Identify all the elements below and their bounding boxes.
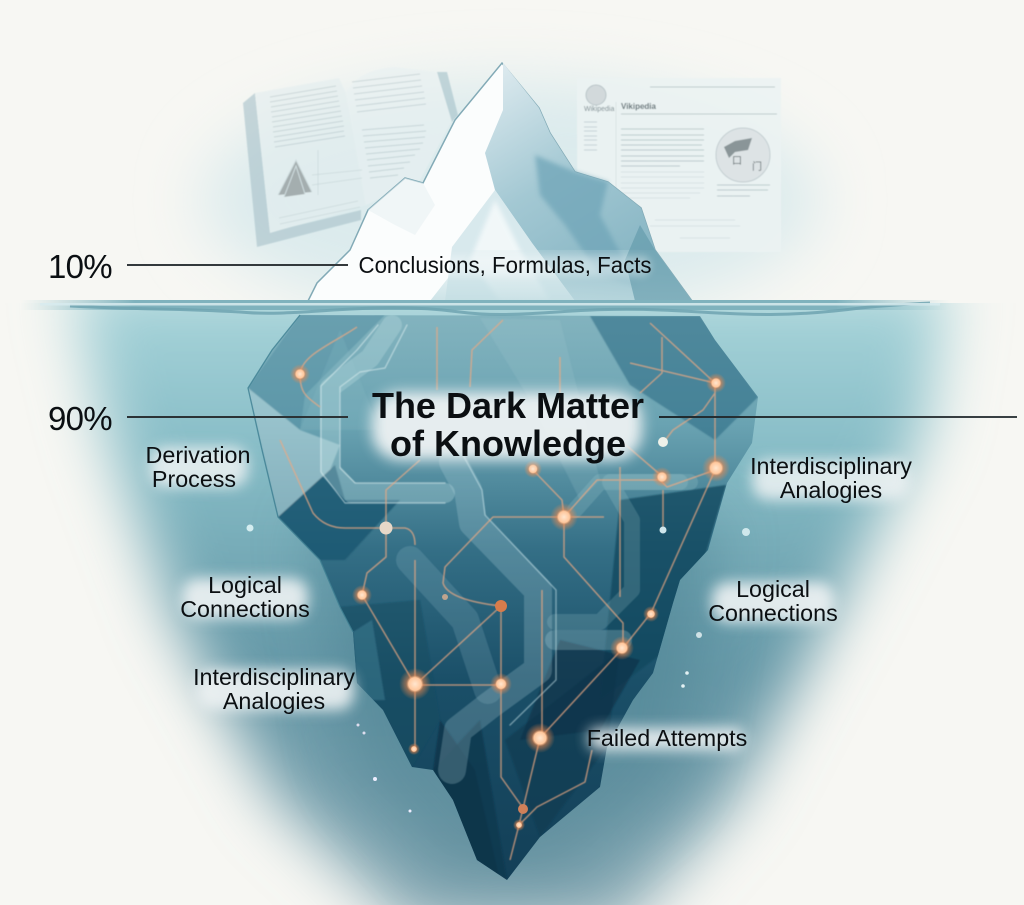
label: logical connections left: Logical — [208, 572, 282, 598]
label: derivation process: Derivation — [146, 442, 250, 468]
90% leader line right — [659, 416, 1017, 418]
label glows — [150, 256, 910, 750]
10% label: 10% — [48, 248, 112, 285]
iceberg tip — [308, 63, 692, 301]
channel: upper right — [555, 482, 680, 622]
90% leader line left — [127, 416, 348, 418]
icon: wikipedia page — [577, 78, 781, 252]
wiki globe: 口 — [732, 156, 742, 167]
channel: left pipe — [321, 325, 445, 503]
underwater glow — [70, 280, 950, 905]
wiki body lines — [584, 87, 777, 238]
90% label: 90% — [48, 400, 112, 437]
label: logical connections left: Connections — [180, 596, 310, 622]
label: logical connections right: Connections — [708, 600, 838, 626]
channel: central pipe — [452, 455, 556, 770]
wiki heading: Vikipedia — [621, 102, 657, 111]
label: derivation process: Process — [152, 466, 236, 492]
title: The Dark Matter — [372, 385, 644, 426]
label: interdisciplinary analogies right: Analogies — [780, 477, 882, 503]
tip label: Conclusions, Formulas, Facts — [358, 252, 652, 278]
knowledge network — [280, 320, 715, 860]
label: failed attempts: Failed Attempts — [587, 725, 747, 751]
wiki small globe — [586, 85, 606, 105]
title: of Knowledge — [390, 423, 626, 464]
icon: open book — [243, 67, 458, 247]
wiki logo word: Wikipedia — [584, 106, 614, 113]
translucent channels — [321, 325, 690, 770]
waterline — [20, 300, 980, 315]
wiki globe — [716, 128, 770, 182]
ice facets — [248, 315, 758, 880]
label: interdisciplinary analogies left: Analogies — [223, 688, 325, 714]
iceberg outline — [248, 315, 353, 632]
channel: horizontal — [555, 630, 622, 650]
network nodes — [246, 364, 750, 831]
book text lines — [270, 74, 426, 224]
label: interdisciplinary analogies right: Interdisciplinary — [750, 453, 912, 479]
channel: wide band — [410, 560, 488, 690]
channel: upper band — [575, 482, 690, 510]
wiki globe: 门 — [752, 160, 762, 173]
10% leader line — [127, 264, 348, 266]
label: logical connections right: Logical — [736, 576, 810, 602]
sky haze — [200, 80, 820, 320]
iceberg body — [240, 300, 770, 890]
label: interdisciplinary analogies left: Interdisciplinary — [193, 664, 355, 690]
